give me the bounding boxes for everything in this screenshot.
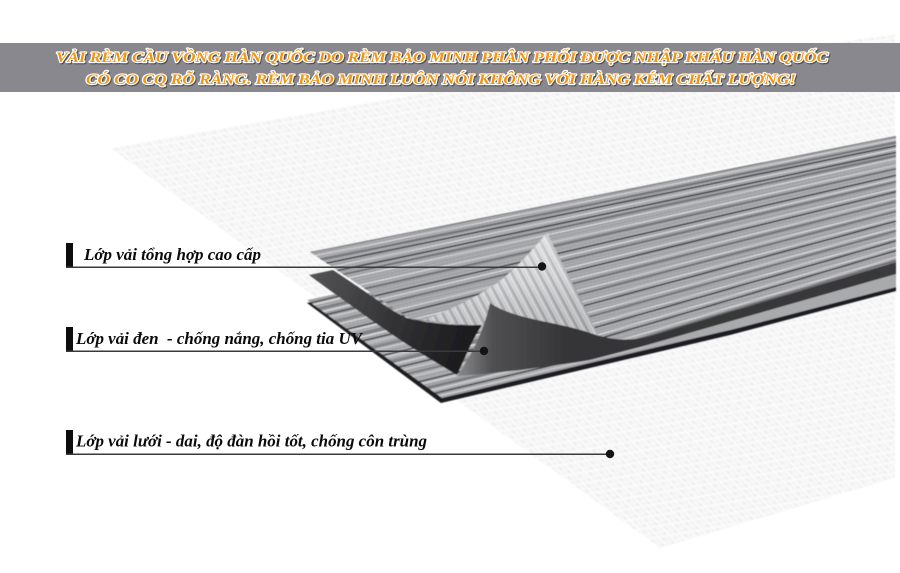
- top synthetic fabric layer: [310, 136, 897, 340]
- label: black layer: [66, 327, 488, 355]
- label: mesh layer: [66, 430, 614, 458]
- banner text: CÓ CO CQ RÕ RÀNG. RÈM BẢO MINH LUÔN NÓI KHÔNG VỚI HÀNG KÉM CHẤT LƯỢNG!: [86, 70, 796, 88]
- header banner: [0, 43, 900, 92]
- folded corner of top layer: [423, 233, 600, 340]
- label: mesh layer: Lớp vải lưới - dai, độ đàn hồi tốt, chống côn trùng: [75, 432, 427, 450]
- black sun-blocking layer: [309, 262, 896, 376]
- banner text: [56, 48, 829, 88]
- bottom gray layer: [307, 268, 896, 403]
- stacked fabric layers: [306, 136, 897, 404]
- label: black layer: Lớp vải đen - chống nắng, chống tia UV: [75, 329, 364, 348]
- label: synthetic layer: Lớp vải tổng hợp cao cấp: [83, 245, 261, 264]
- banner text: VẢI RÈM CẦU VỒNG HÀN QUỐC DO RÈM BẢO MINH PHÂN PHỐI ĐƯỢC NHẬP KHẨU HÀN QUỐC: [56, 48, 829, 66]
- black layer curl: [457, 262, 896, 376]
- mesh fabric layer: [110, 35, 895, 548]
- label: synthetic layer: [66, 243, 546, 271]
